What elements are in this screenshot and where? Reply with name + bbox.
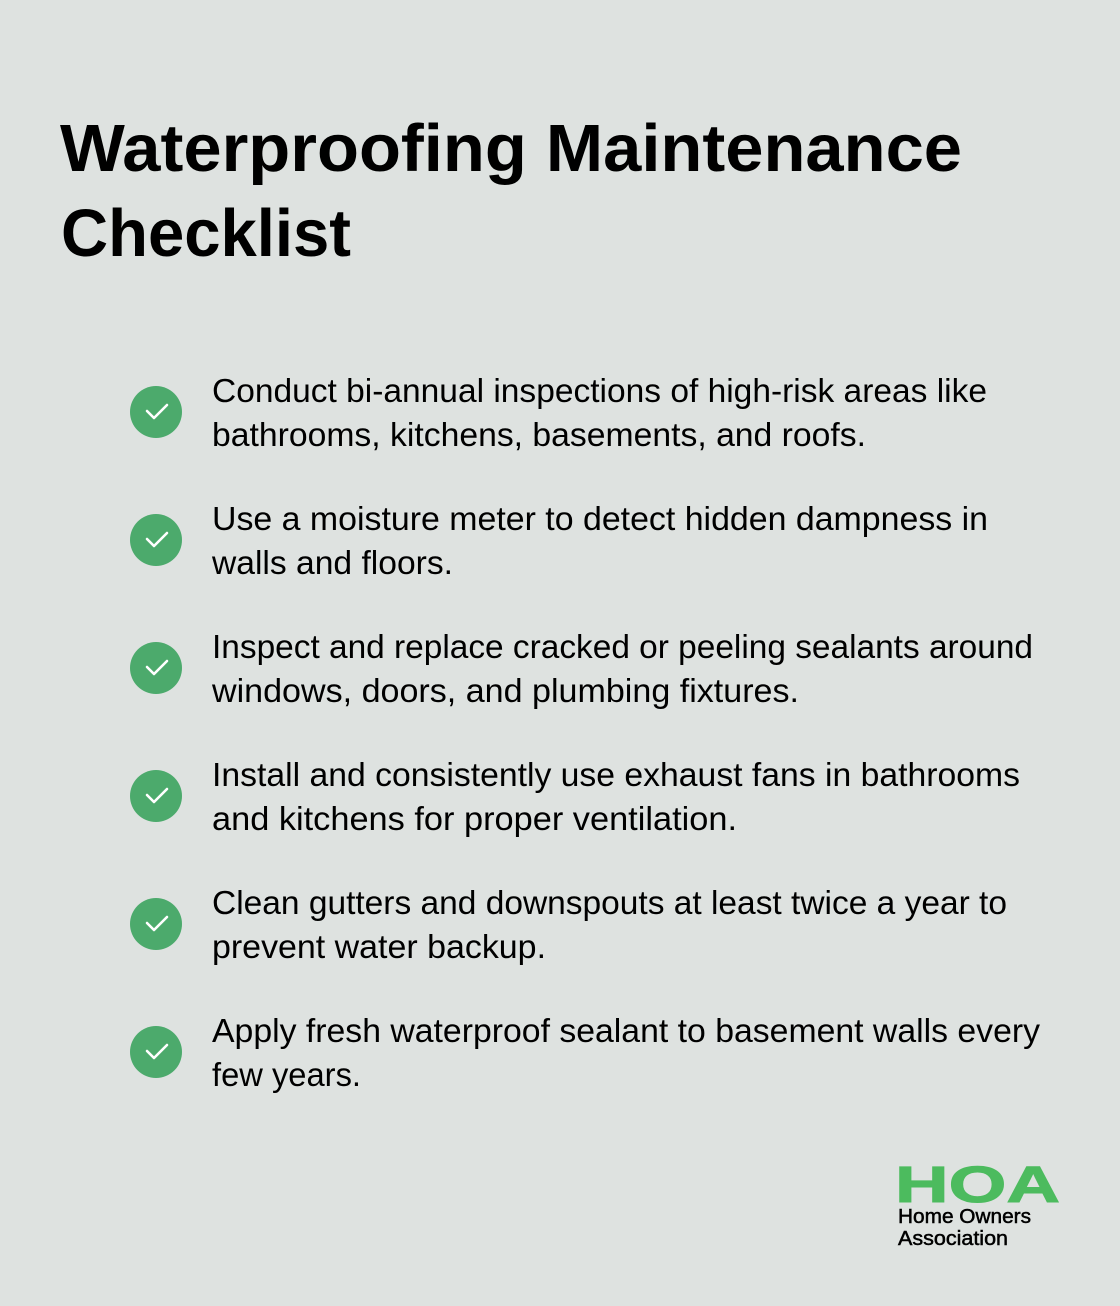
item text: Conduct bi-annual inspections of high-risk areas like (212, 372, 987, 409)
item text: walls and floors. (211, 544, 453, 581)
item text (211, 628, 1033, 709)
item text: and kitchens for proper ventilation. (212, 800, 737, 837)
item text: Clean gutters and downspouts at least twice a year to (212, 884, 1007, 921)
icon: check (130, 1026, 182, 1078)
logo: HOA Home Owners Association: HOA (895, 1156, 1060, 1213)
item: inspections (130, 372, 987, 453)
item: gutters (130, 884, 1007, 965)
item text (212, 372, 987, 453)
item text: few years. (212, 1056, 361, 1093)
icon: check (130, 898, 182, 950)
logo: HOA Home Owners Association: Association (898, 1228, 1008, 1250)
title: Checklist (61, 196, 351, 271)
title (60, 111, 962, 271)
logo: HOA Home Owners Association (895, 1156, 1060, 1250)
item text (212, 756, 1020, 837)
icon: check (130, 514, 182, 566)
item text: bathrooms, kitchens, basements, and roofs. (212, 416, 866, 453)
title: Waterproofing Maintenance (60, 111, 962, 186)
item: sealants (130, 628, 1033, 709)
item: moisture meter (130, 500, 988, 581)
item text: Install and consistently use exhaust fans in bathrooms (212, 756, 1020, 793)
item text (212, 884, 1007, 965)
item text: windows, doors, and plumbing fixtures. (211, 672, 799, 709)
checklist (130, 372, 1041, 1093)
item: basement sealant (130, 1012, 1041, 1093)
logo: HOA Home Owners Association: Home Owners (898, 1206, 1031, 1228)
item: exhaust fans (130, 756, 1020, 837)
icon: check (130, 770, 182, 822)
item text (211, 500, 988, 581)
icon: check (130, 642, 182, 694)
icon: check (130, 386, 182, 438)
item text: Apply fresh waterproof sealant to basement walls every (212, 1012, 1041, 1049)
item text: Use a moisture meter to detect hidden dampness in (212, 500, 988, 537)
item text: prevent water backup. (212, 928, 546, 965)
item text: Inspect and replace cracked or peeling sealants around (212, 628, 1033, 665)
item text (212, 1012, 1041, 1093)
